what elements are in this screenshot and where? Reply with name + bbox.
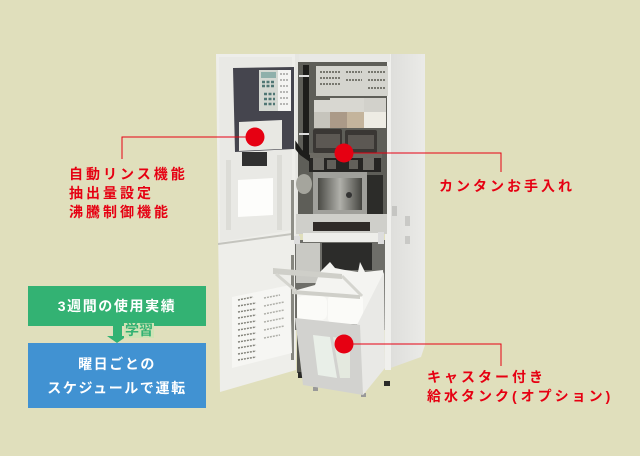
handle bars — [273, 268, 362, 299]
label plate — [239, 120, 282, 151]
callout: rinse and brewing features: 自動リンス機能 — [69, 166, 188, 182]
dark hoppers — [313, 129, 377, 153]
blue box: weekly schedule: スケジュールで運転 — [47, 380, 187, 396]
callout: rinse and brewing features — [69, 166, 188, 220]
leader line: easy care — [344, 153, 501, 172]
black bracket — [242, 152, 267, 166]
door instruction paper — [232, 285, 292, 368]
door — [216, 54, 296, 392]
cart front — [295, 318, 363, 395]
callout: water tank option: 給水タンク(オプション) — [427, 388, 610, 404]
leader line: water tank — [344, 344, 501, 366]
compartment floor — [296, 214, 387, 234]
instruction sticker — [316, 66, 388, 96]
callout: rinse and brewing features: 抽出量設定 — [69, 185, 154, 201]
ingredient canisters — [314, 98, 386, 128]
mixing units — [308, 153, 382, 172]
marker: easy care — [334, 144, 354, 162]
white panel — [238, 178, 273, 217]
callout: water tank option: キャスター付き — [427, 369, 546, 385]
panel paper — [278, 70, 291, 111]
upper compartment — [288, 54, 390, 244]
casters — [298, 372, 390, 397]
green box: usage history — [28, 286, 206, 326]
green box: usage history: 3週間の使用実績 — [58, 298, 176, 314]
blue box: weekly schedule — [28, 343, 206, 408]
lower compartment — [294, 232, 385, 373]
water tank with cart — [273, 262, 385, 395]
tanks — [297, 262, 384, 325]
blue box: weekly schedule: 曜日ごとの — [78, 356, 156, 372]
coffee box — [313, 172, 383, 217]
callout: easy care: カンタンお手入れ — [439, 178, 575, 194]
control panel — [233, 67, 294, 152]
tank window — [313, 335, 350, 378]
black tubes — [288, 65, 310, 162]
keypad — [259, 70, 278, 111]
leader line: door controls — [122, 137, 255, 159]
cart side — [357, 272, 385, 395]
callout: water tank option — [427, 369, 610, 404]
marker: door controls — [246, 128, 264, 146]
funnel — [296, 174, 312, 194]
label: learning: 学習 — [125, 322, 153, 338]
dark tray — [313, 222, 370, 231]
cabinet side panel — [385, 54, 425, 370]
callout: rinse and brewing features: 沸騰制御機能 — [69, 204, 171, 220]
marker: water tank — [334, 334, 354, 354]
